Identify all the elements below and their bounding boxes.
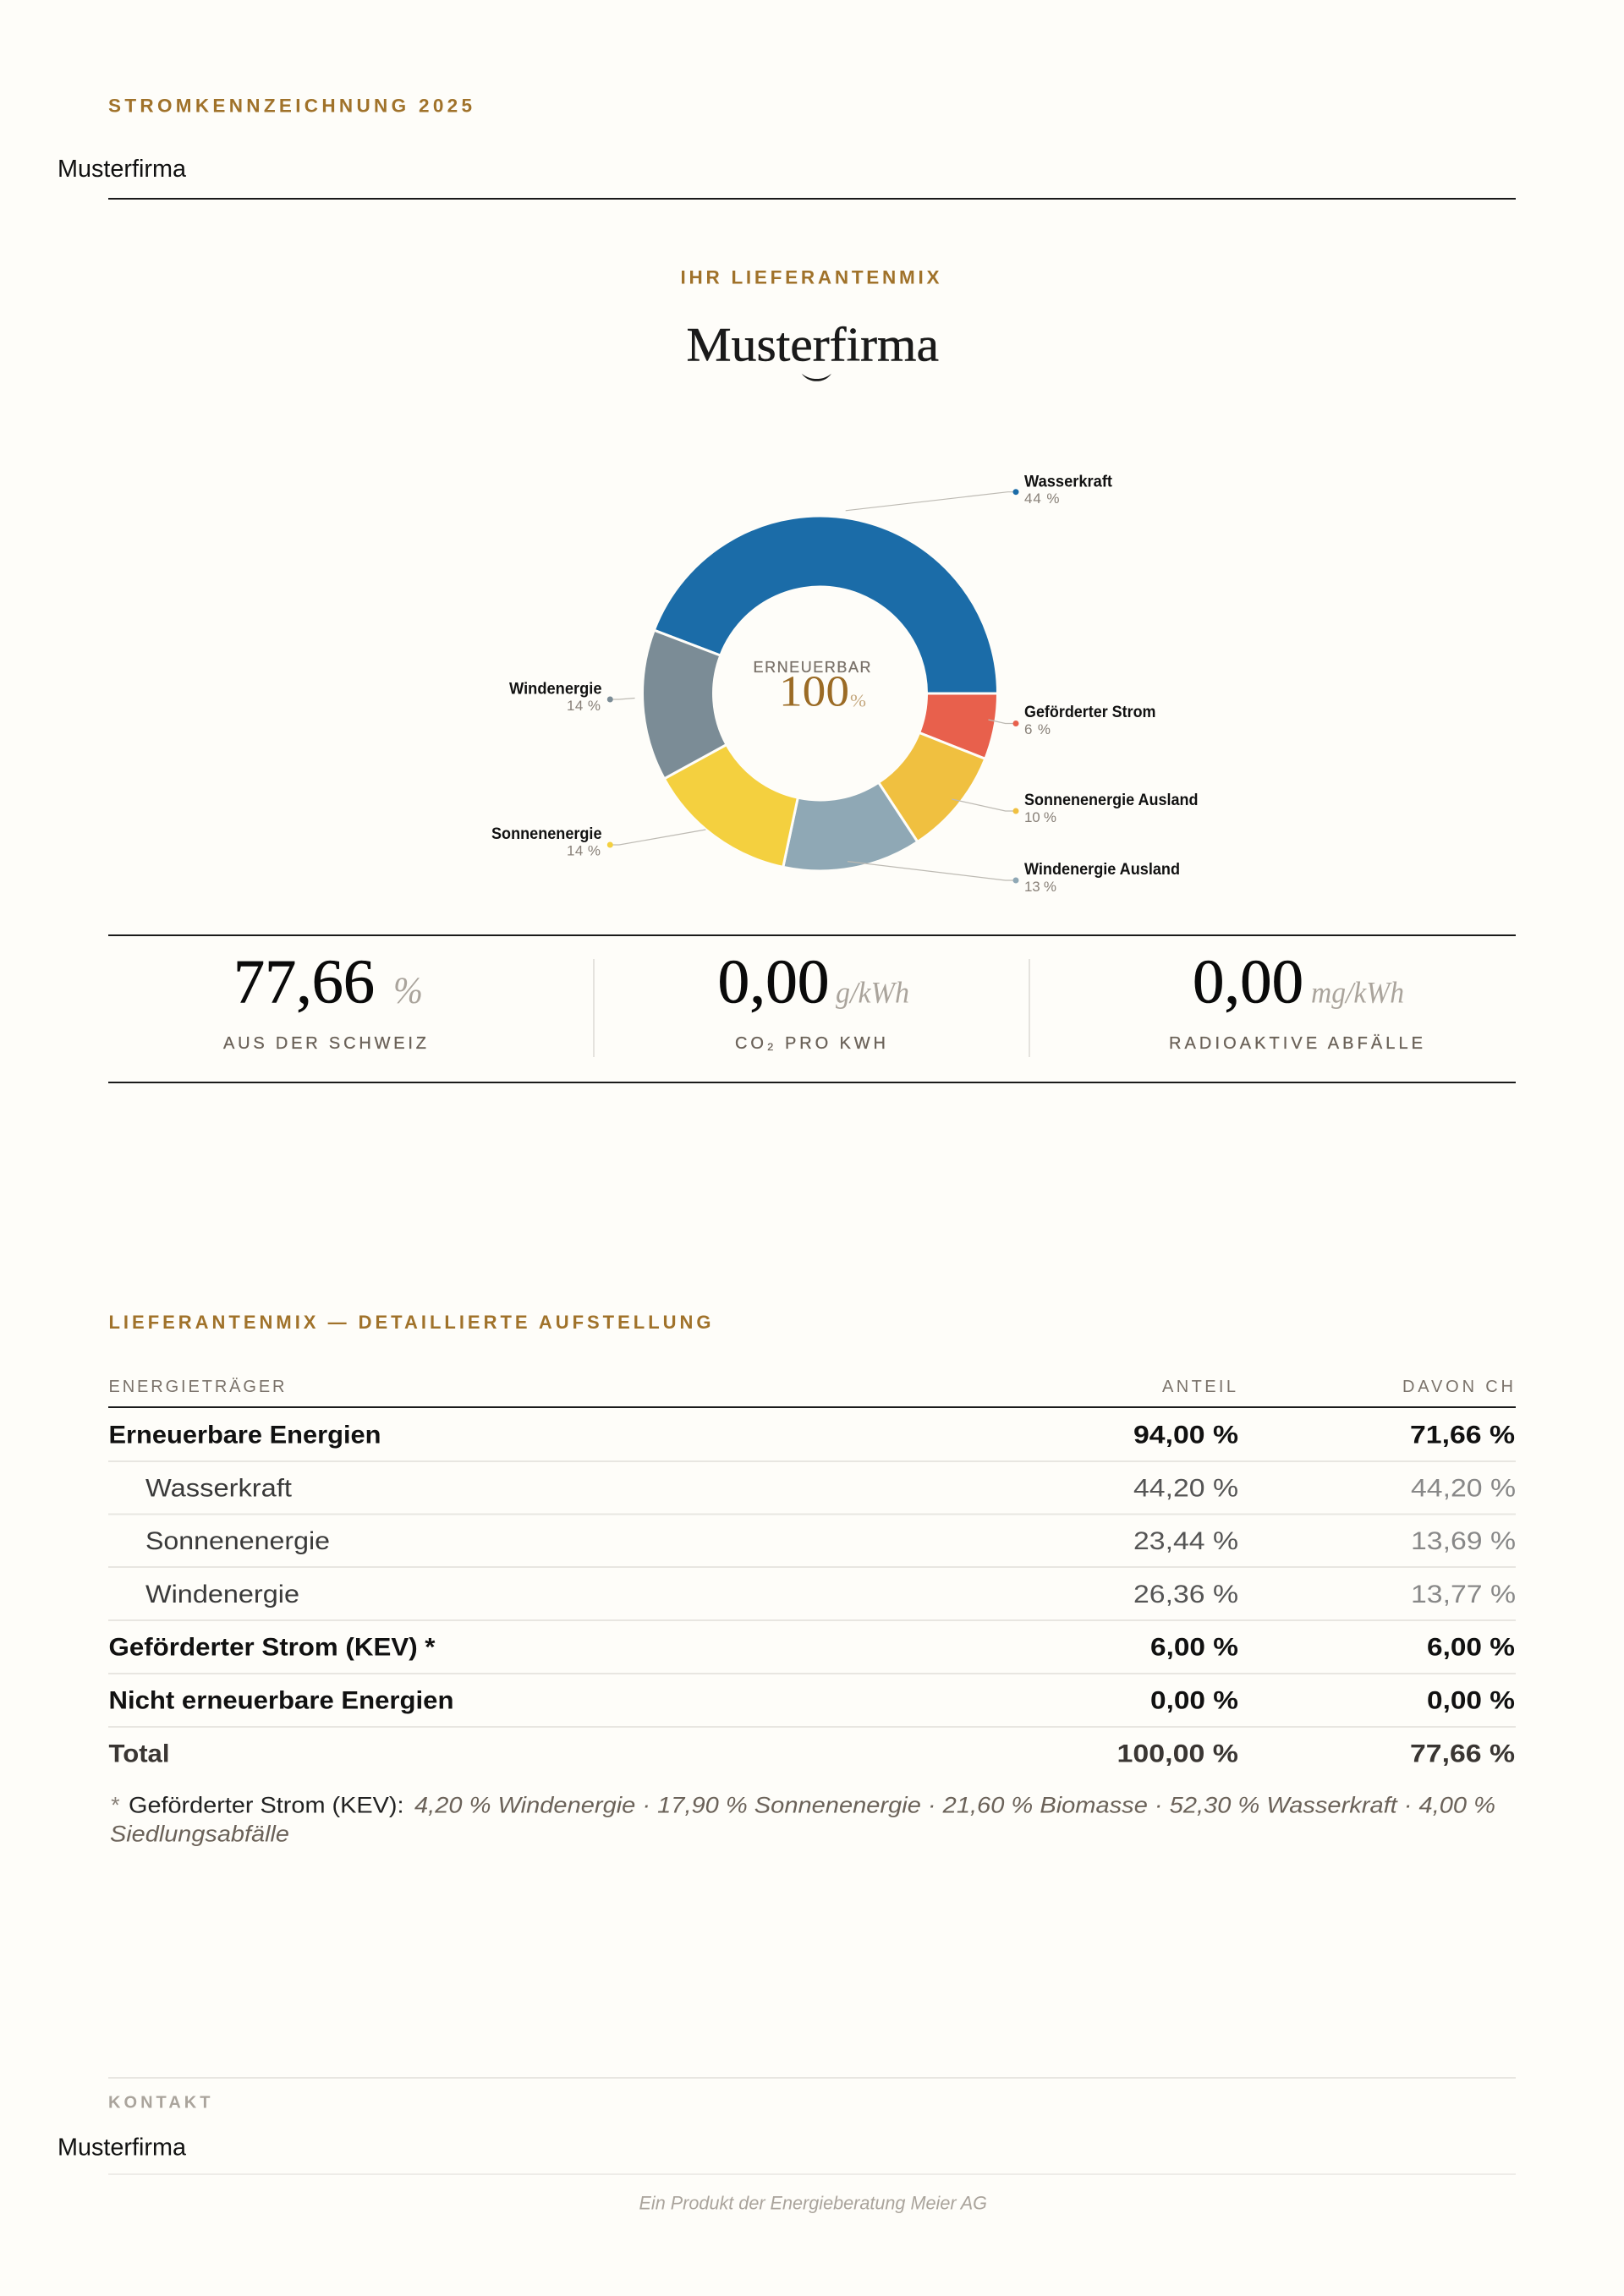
row: Erneuerbare Energien: Erneuerbare Energien	[108, 1421, 381, 1449]
callout: Sonnenenergie: Sonnenenergie	[491, 825, 602, 843]
section heading: detail table: LIEFERANTENMIX — DETAILLIERTE AUFSTELLUNG	[108, 1312, 710, 1333]
KPI: radioaktive Abfälle: mg/kWh	[1311, 976, 1404, 1010]
callout: Geförderter Strom: 6 %	[1024, 721, 1051, 737]
KPI: CO2 pro kWh: CO₂ PRO KWH	[735, 1034, 886, 1053]
donut chart	[491, 474, 1198, 895]
row: Geförderter Strom: 6,00 %	[1427, 1634, 1515, 1662]
eyebrow: Stromkennzeichnung 2025: STROMKENNZEICHNUNG 2025	[108, 95, 472, 117]
contact footer	[58, 2077, 1516, 2214]
row: Erneuerbare Energien	[108, 1421, 1515, 1449]
footnote: *	[110, 1792, 120, 1817]
contact name: Musterfirma	[58, 2134, 187, 2161]
center label: %	[850, 690, 866, 710]
callout: Wasserkraft	[846, 474, 1113, 511]
KPI: CO2 pro kWh: g/kWh	[836, 976, 909, 1010]
row: Wasserkraft: 44,20 %	[1411, 1474, 1516, 1502]
row: Total	[108, 1740, 1515, 1767]
footnote: Siedlungsabfälle	[110, 1821, 289, 1846]
footnote: Geförderter Strom (KEV):	[129, 1792, 404, 1817]
callout: Geförderter Strom: Geförderter Strom	[1024, 704, 1155, 721]
row: Geförderter Strom: 6,00 %	[1150, 1634, 1238, 1662]
row: Sonnenenergie: 23,44 %	[1133, 1527, 1238, 1555]
KPI: radioaktive Abfälle: RADIOAKTIVE ABFÄLLE	[1169, 1034, 1423, 1053]
row: Windenergie: Windenergie	[145, 1581, 299, 1608]
row: Geförderter Strom	[108, 1634, 1515, 1662]
KPI: radioaktive Abfälle: 0,00	[1193, 947, 1303, 1016]
KPI: CO2 pro kWh	[717, 947, 909, 1053]
KPI: aus der Schweiz: 77,66	[233, 947, 375, 1016]
callout: Windenergie	[509, 680, 635, 714]
callout: Sonnenenergie Ausland: Sonnenenergie Ausland	[1024, 792, 1198, 809]
row: Wasserkraft: Wasserkraft	[145, 1474, 293, 1502]
row: Erneuerbare Energien: 94,00 %	[1133, 1421, 1238, 1449]
header	[58, 95, 1516, 200]
center label: ERNEUERBAR	[753, 659, 871, 676]
table header: ENERGIETRÄGER	[108, 1378, 284, 1396]
segment: Wasserkraft	[654, 516, 998, 693]
center label: 100	[779, 668, 849, 715]
KPI: CO2 pro kWh: 0,00	[717, 947, 829, 1016]
segment: Windenergie	[643, 630, 727, 779]
row: Total: 77,66 %	[1410, 1740, 1515, 1767]
callout: Windenergie: 14 %	[567, 698, 601, 714]
row: Nicht erneuerbare Energien: 0,00 %	[1150, 1686, 1238, 1715]
row: Windenergie: 26,36 %	[1133, 1581, 1238, 1608]
row: Geförderter Strom: Geförderter Strom (KEV) *	[108, 1634, 436, 1662]
row: Nicht erneuerbare Energien: Nicht erneuerbare Energien	[108, 1686, 453, 1715]
callout: Windenergie Ausland: Windenergie Ausland	[1024, 861, 1180, 879]
row: Sonnenenergie	[145, 1527, 1516, 1555]
credit line: Ein Produkt der Energieberatung Meier AG	[639, 2193, 987, 2214]
row: Erneuerbare Energien: 71,66 %	[1410, 1421, 1515, 1449]
table header: DAVON CH	[1402, 1378, 1513, 1396]
segment: Sonnenenergie Ausland	[879, 732, 985, 842]
KPI strip	[108, 934, 1516, 1083]
heading title: Musterfirma	[687, 318, 939, 372]
callout: Sonnenenergie Ausland	[952, 792, 1198, 825]
company name: Musterfirma	[58, 156, 187, 183]
mix heading	[680, 267, 939, 381]
KPI: aus der Schweiz: AUS DER SCHWEIZ	[223, 1034, 426, 1053]
callout: Wasserkraft: 44 %	[1024, 490, 1059, 507]
center label	[753, 659, 871, 715]
callout: Windenergie: Windenergie	[509, 680, 602, 699]
callout: Windenergie Ausland	[848, 861, 1180, 895]
row: Windenergie	[145, 1581, 1516, 1608]
row: Nicht erneuerbare Energien: 0,00 %	[1427, 1686, 1515, 1715]
footnote	[110, 1792, 1495, 1846]
callout: Sonnenenergie	[491, 825, 705, 859]
KPI: aus der Schweiz: %	[393, 969, 423, 1011]
row: Wasserkraft: 44,20 %	[1133, 1474, 1238, 1502]
table header	[108, 1378, 1516, 1408]
callout: Wasserkraft: Wasserkraft	[1024, 474, 1113, 490]
detail table	[108, 1378, 1516, 1767]
row: Total: Total	[108, 1740, 169, 1767]
callout: Geförderter Strom	[988, 704, 1155, 737]
KPI: aus der Schweiz	[223, 947, 426, 1053]
clipped descender swoosh	[802, 374, 831, 381]
KPI: radioaktive Abfälle	[1169, 947, 1423, 1053]
segment: Sonnenenergie	[664, 744, 798, 867]
row: Sonnenenergie: 13,69 %	[1411, 1527, 1516, 1555]
row: Windenergie: 13,77 %	[1411, 1581, 1516, 1608]
footnote: 4,20 % Windenergie · 17,90 % Sonnenenergie · 21,60 % Biomasse · 52,30 % Wasserkraft · 4,00 %	[414, 1792, 1495, 1817]
callout: Windenergie Ausland: 13 %	[1024, 879, 1056, 895]
callout: Sonnenenergie: 14 %	[567, 842, 601, 859]
segment: Windenergie Ausland	[783, 782, 918, 871]
contact label: KONTAKT	[108, 2093, 210, 2112]
heading label: IHR LIEFERANTENMIX	[680, 267, 939, 288]
row: Nicht erneuerbare Energien	[108, 1686, 1515, 1715]
callout: Sonnenenergie Ausland: 10 %	[1024, 809, 1056, 825]
segment: Geförderter Strom	[919, 693, 998, 759]
row: Sonnenenergie: Sonnenenergie	[145, 1527, 330, 1555]
row: Total: 100,00 %	[1116, 1740, 1238, 1767]
row: Wasserkraft	[145, 1474, 1516, 1502]
table header: ANTEIL	[1162, 1378, 1236, 1396]
